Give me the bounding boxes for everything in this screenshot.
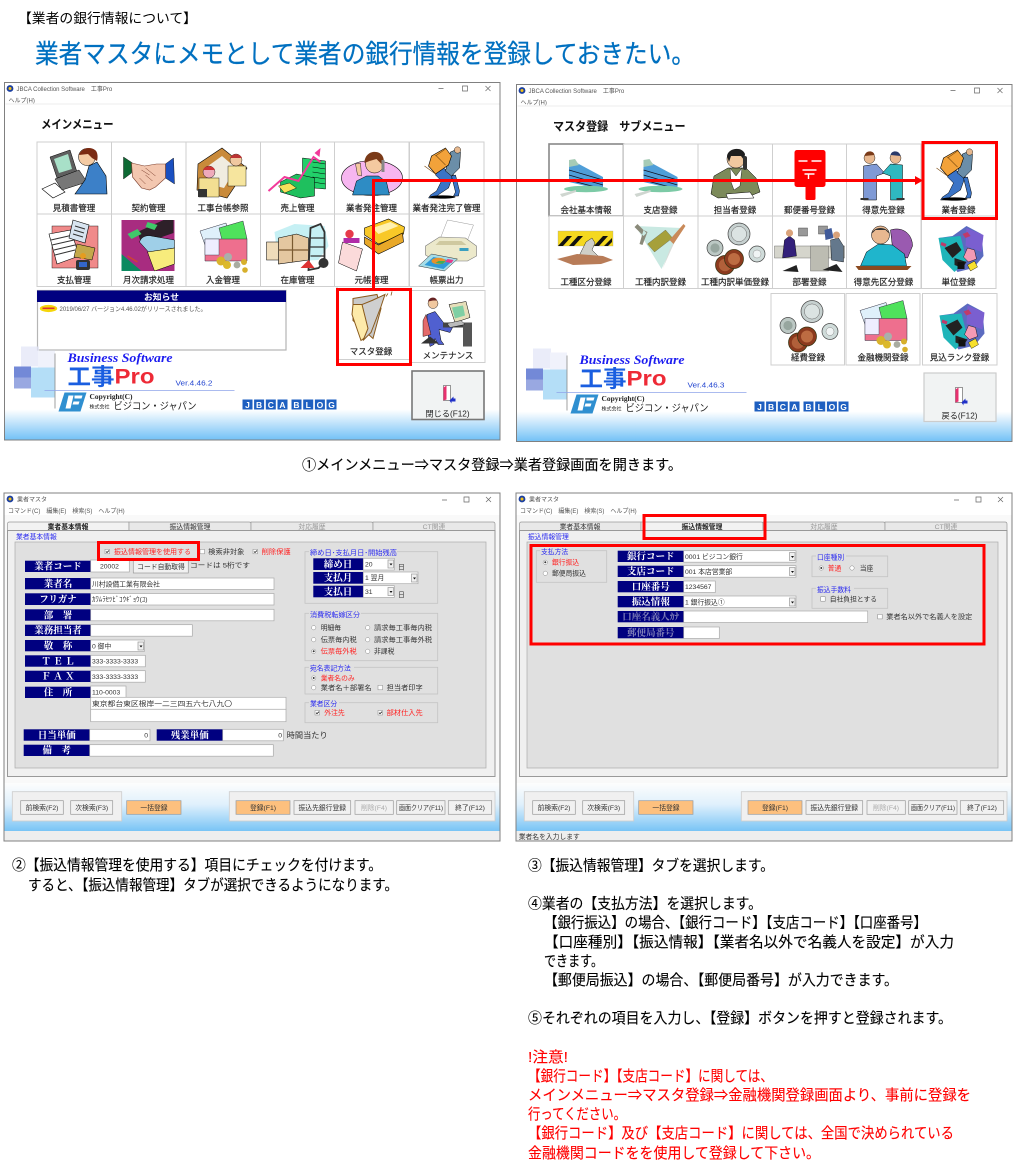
highlight: transfer fields red box	[531, 546, 984, 644]
bank fields: 口座番号	[632, 581, 670, 593]
group: addressee notation: 業者名のみ	[321, 673, 355, 682]
tile: 郵便番号登録	[772, 144, 847, 216]
group: vendor class	[305, 699, 438, 723]
text block: warning note: 行ってください。	[528, 1106, 626, 1123]
group: account type: 当座	[860, 563, 873, 572]
text block: warning note: メインメニュー⇒マスタ登録⇒金融機関登録画面より、事前に登録を	[528, 1087, 971, 1104]
bottom buttons: 一括登録	[140, 803, 168, 812]
JBCA BLOG badge: L	[818, 402, 823, 412]
JBCA BLOG badge: B	[256, 400, 262, 410]
text block: step 3: ③【振込情報管理】タブを選択します。	[528, 856, 774, 874]
notice box: 2019/06/27 バージョン4.46.02がリリースされました。	[60, 304, 206, 313]
text block: warning note: 【銀行コード】及び【支店コード】に関しては、全国で決められている	[528, 1125, 954, 1142]
panel: main menu window: JBCA Collection Software 工事Pro	[16, 85, 113, 93]
tile: メンテナンス	[411, 290, 485, 362]
tile: 単位登録	[922, 216, 996, 288]
vendor fields: コード自動取得	[137, 562, 185, 571]
JBCA BLOG badge: C	[268, 400, 274, 410]
vendor fields: 20002	[100, 564, 119, 570]
JBCA BLOG badge: O	[317, 400, 324, 410]
tile: 業者登録	[922, 144, 996, 216]
bottom buttons: 登録(F1)	[762, 803, 788, 812]
form group background	[527, 542, 998, 768]
bottom buttons: 画面クリア(F11)	[399, 804, 443, 812]
group: vendor class: 外注先	[324, 708, 345, 717]
logo: Business Software 工事Pro: Pro	[114, 366, 154, 388]
JBCA BLOG badge: J	[757, 402, 762, 412]
tile: 得意先区分登録: 得意先区分登録	[854, 277, 914, 287]
close button: 閉じる(F12)	[425, 410, 470, 418]
option: custom account holder	[878, 612, 973, 621]
vendor fields: 0	[278, 732, 282, 740]
tile: 帳票出力	[410, 214, 484, 286]
group: addressee notation: 担当者印字	[387, 683, 423, 692]
form pane	[520, 530, 1007, 776]
tabs	[520, 522, 1007, 531]
panel: vendor basic info window	[4, 493, 500, 841]
text block: warning note: 【銀行コード】【支店コード】に関しては、	[528, 1068, 773, 1085]
back button	[924, 373, 996, 422]
bottom buttons: 削除(F4)	[873, 803, 899, 812]
option checkboxes: 振込情報管理を使用する	[114, 547, 191, 556]
tile: 工種区分登録	[549, 216, 624, 288]
panel: master sub menu window: JBCA Collection Software 工事Pro	[528, 87, 625, 95]
tile: 郵便番号登録: 郵便番号登録	[784, 205, 835, 215]
tile: 支払管理	[37, 214, 112, 286]
highlight: 業者登録 red box	[923, 142, 996, 218]
group: transfer fee: 自社負担とする	[830, 594, 877, 603]
vendor fields: 333-3333-3333	[92, 674, 138, 681]
JBCA BLOG badge: L	[306, 400, 311, 410]
logo: Business Software 工事Pro: Ver.4.46.2	[176, 378, 212, 388]
logo: Business Software 工事Pro: Copyright(C)	[90, 393, 133, 401]
tile: 見込ランク登録	[922, 294, 997, 365]
group: payment method: 郵便局振込	[552, 569, 586, 578]
bottom buttons: 終了(F12)	[455, 803, 485, 812]
bottom buttons: 削除(F4)	[361, 803, 387, 812]
tile: 経費登録: 経費登録	[791, 352, 825, 362]
JBCA BLOG badge: J	[245, 400, 250, 410]
tile: 金融機関登録: 金融機関登録	[857, 352, 909, 362]
tile: 見込ランク登録: 見込ランク登録	[930, 352, 990, 362]
tile: 経費登録	[771, 294, 844, 365]
tile: 元帳管理	[334, 214, 409, 286]
vendor fields: 敬 称	[44, 640, 74, 652]
header label: 【業者の銀行情報について】	[18, 11, 197, 26]
group: transfer fee: 振込手数料	[817, 585, 851, 594]
tile: 業者発注管理	[334, 142, 409, 214]
tile: 工種内訳登録	[624, 216, 698, 288]
group: payment method	[536, 547, 607, 582]
bank fields: 001 本店営業部	[685, 567, 732, 576]
text block: step 4: できます。	[544, 953, 603, 970]
option checkboxes: 削除保護	[262, 547, 291, 556]
panel: transfer info window: 業者マスタ	[529, 495, 559, 503]
tile: 部署登録	[772, 216, 847, 288]
option: custom account holder: 業者名以外で名義人を設定	[886, 612, 973, 621]
bank fields: 口座名義人ｶﾅ	[622, 611, 679, 623]
tabs	[8, 522, 495, 531]
bottom buttons: 前検索(F2)	[538, 803, 570, 812]
title: 業者マスタにメモとして業者の銀行情報を登録しておきたい。	[35, 39, 695, 69]
tile: メンテナンス: メンテナンス	[423, 350, 473, 360]
group: closing and payment dates: 1 翌月	[365, 574, 384, 582]
text block: warning note	[528, 1049, 971, 1162]
tile: 支店登録	[624, 144, 698, 216]
group: consumption tax: 伝票毎内税	[321, 635, 357, 644]
text block: step 2: すると、【振込情報管理】タブが選択できるようになります。	[28, 876, 398, 894]
panel: vendor basic info window: コマンド(C) 編集(E) 検索(S) ヘルプ(H)	[8, 507, 125, 515]
tile: 業者発注完了管理: 業者発注完了管理	[412, 203, 481, 213]
group title: 振込情報管理: 振込情報管理	[528, 532, 569, 541]
text block: step 4: 【銀行振込】の場合、【銀行コード】【支店コード】【口座番号】	[544, 914, 927, 932]
bank fields: 1234567	[685, 584, 712, 591]
logo: Business Software 工事Pro: Business Software	[66, 350, 173, 365]
group: vendor class: 業者区分	[310, 699, 337, 708]
text block: warning note: 金融機関コードをを使用して登録して下さい。	[528, 1145, 820, 1162]
tile: マスタ登録: マスタ登録	[350, 346, 393, 356]
logo: Business Software 工事Pro: 工事	[580, 366, 626, 392]
group: closing and payment dates: 締め日･支払月日･開始残高	[310, 548, 397, 557]
vendor fields: Ｔ Ｅ Ｌ	[41, 656, 75, 667]
JBCA BLOG badge: O	[829, 402, 836, 412]
notice box	[37, 290, 286, 350]
JBCA BLOG badge: C	[780, 402, 786, 412]
bank fields: 0001 ビジコン銀行	[685, 552, 743, 561]
tile: 支払管理: 支払管理	[57, 275, 91, 285]
group: payment method: 銀行振込	[552, 558, 579, 567]
tile: 契約管理	[112, 142, 186, 214]
tabs: 業者基本情報	[48, 522, 89, 531]
bottom buttons: 次検索(F3)	[587, 803, 620, 812]
tabs: 振込情報管理	[170, 522, 211, 531]
panel: master sub menu window: ヘルプ(H)	[520, 100, 547, 106]
tabs: CT関連	[423, 522, 446, 531]
tile: 在庫管理	[260, 214, 335, 286]
tabs: CT関連	[935, 522, 958, 531]
tile: 業者発注完了管理	[410, 142, 484, 214]
vendor fields: 日当単価	[38, 729, 76, 741]
logo: Business Software 工事Pro: ビジコン・ジャパン	[114, 400, 196, 412]
vendor fields: 業者コード	[34, 561, 82, 573]
group: closing and payment dates: 締め日	[324, 558, 352, 570]
logo: Business Software 工事Pro: ビジコン・ジャパン	[626, 402, 708, 414]
tile: マスタ登録	[337, 286, 411, 360]
group: payment method: 支払方法	[541, 547, 568, 556]
group: consumption tax	[305, 610, 438, 661]
logo: Business Software 工事Pro: 工事	[68, 364, 114, 390]
tile: 得意先区分登録	[846, 216, 921, 288]
JBCA BLOG badge: A	[279, 400, 286, 410]
logo: Business Software 工事Pro	[526, 348, 746, 414]
tile: 入金管理: 入金管理	[206, 275, 240, 285]
bank fields: 支店コード	[627, 566, 674, 578]
group: closing and payment dates	[305, 548, 438, 603]
highlight: 振込情報管理 tab red box	[644, 516, 765, 538]
panel: main menu window: ヘルプ(H)	[8, 98, 35, 104]
vendor fields: 時間当たり	[287, 730, 328, 740]
vendor fields: フリガナ	[39, 594, 77, 606]
highlight: マスタ登録 red box	[338, 290, 410, 364]
vendor fields: ｶﾜﾑﾗｾﾂﾋﾞｺｳｷﾞｮｳ(ﾕ)	[92, 596, 148, 604]
close button	[412, 371, 484, 420]
bank fields	[618, 551, 868, 639]
tile: 得意先登録	[846, 144, 921, 216]
text block: step 4	[528, 896, 954, 989]
vendor fields: 住 所	[44, 687, 73, 699]
group: closing and payment dates: 20	[365, 562, 373, 568]
group: closing and payment dates: 日	[398, 564, 405, 572]
tabs: 対応履歴	[298, 522, 326, 531]
group: account type: 口座種別	[817, 552, 844, 562]
tabs: 振込情報管理	[682, 522, 723, 531]
tile: 工事台帳参照	[186, 142, 260, 214]
highlight: 振込情報管理を使用する red box	[98, 542, 198, 560]
group: closing and payment dates: 日	[398, 591, 405, 599]
status bar text: 業者名を入力します	[519, 832, 580, 841]
vendor fields: 備 考	[42, 745, 71, 757]
vendor fields: 残業単価	[171, 729, 209, 741]
group: consumption tax: 非課税	[374, 647, 395, 656]
group: account type	[812, 552, 888, 577]
panel: master sub menu window: マスタ登録 サブメニュー	[553, 118, 686, 134]
vendor fields: 0 御中	[92, 642, 111, 650]
tile: 入金管理	[186, 214, 260, 286]
panel: master sub menu window	[516, 84, 1012, 442]
JBCA BLOG badge	[754, 402, 848, 412]
bank fields: 銀行コード	[627, 551, 674, 563]
bottom buttons: 振込先銀行登録	[811, 803, 858, 812]
group: vendor class: 部材仕入先	[387, 708, 423, 717]
tile: 売上管理	[260, 142, 335, 214]
tile: 月次請求処理: 月次請求処理	[123, 275, 174, 285]
vendor fields: 東京都台東区根岸一二三四五六七八九〇	[92, 699, 232, 708]
panel: transfer info window: コマンド(C) 編集(E) 検索(S) ヘルプ(H)	[520, 507, 637, 515]
bottom buttons: 終了(F12)	[967, 803, 997, 812]
panel: main menu window	[4, 82, 500, 440]
back button: 戻る(F12)	[942, 412, 978, 420]
tile: 工種内訳単価登録: 工種内訳単価登録	[701, 277, 769, 287]
tile: 見積書管理: 見積書管理	[53, 203, 96, 213]
panel: transfer info window	[516, 493, 1012, 841]
logo: Business Software 工事Pro: Business Software	[578, 352, 685, 367]
logo: Business Software 工事Pro: 株式会社	[90, 404, 110, 410]
group: consumption tax: 明細毎	[321, 623, 341, 632]
tile: 工種内訳登録: 工種内訳登録	[635, 277, 686, 287]
bank fields: 振込情報	[632, 596, 670, 608]
tile: 会社基本情報: 会社基本情報	[560, 205, 612, 215]
bottom buttons: 登録(F1)	[250, 803, 276, 812]
tabs: 対応履歴	[810, 522, 838, 531]
vendor fields	[24, 560, 328, 757]
group: transfer fee	[812, 585, 888, 608]
text block: warning note: !注意!	[528, 1049, 568, 1066]
form group background	[15, 542, 486, 768]
tile: 担当者登録: 担当者登録	[714, 205, 757, 215]
JBCA BLOG badge: G	[328, 400, 335, 410]
caption: step 1: ①メインメニュー⇒マスタ登録⇒業者登録画面を開きます。	[302, 457, 682, 474]
tile: 売上管理: 売上管理	[280, 203, 315, 213]
tile: 担当者登録	[698, 144, 772, 216]
group: closing and payment dates: 31	[365, 589, 373, 596]
tile: 工事台帳参照: 工事台帳参照	[197, 203, 249, 213]
vendor fields: Ｆ Ａ Ｘ	[41, 672, 75, 683]
tile: 金融機関登録	[846, 294, 920, 365]
text block: step 4: 【郵便局振込】の場合、【郵便局番号】が入力できます。	[544, 972, 898, 989]
option checkboxes: 検索非対象	[208, 547, 245, 556]
panel: vendor basic info window: 業者マスタ	[17, 495, 47, 503]
logo: Business Software 工事Pro: Copyright(C)	[602, 395, 645, 403]
logo: Business Software 工事Pro	[14, 346, 234, 412]
logo: Business Software 工事Pro: Pro	[626, 368, 666, 390]
vendor fields: 業務担当者	[34, 625, 82, 637]
tile: 見積書管理	[37, 142, 112, 214]
tile: 部署登録: 部署登録	[792, 277, 827, 287]
JBCA BLOG badge: A	[791, 402, 798, 412]
group: account type: 普通	[828, 563, 841, 572]
tile: 工種区分登録: 工種区分登録	[560, 277, 612, 287]
text block: step 2: ②【振込情報管理を使用する】項目にチェックを付けます。	[12, 856, 382, 874]
vendor fields: コードは 5桁です	[190, 560, 250, 570]
tile: 支店登録: 支店登録	[643, 205, 678, 215]
text block: step 4: 【口座種別】【振込情報】【業者名以外で名義人を設定】が入力	[544, 934, 954, 951]
bottom buttons: 前検索(F2)	[26, 803, 58, 812]
vendor fields: 110-0003	[92, 690, 120, 696]
bank fields: 郵便局番号	[627, 627, 675, 639]
logo: Business Software 工事Pro: Ver.4.46.3	[688, 380, 724, 390]
group: addressee notation	[305, 664, 438, 694]
group: consumption tax: 伝票毎外税	[321, 647, 357, 656]
group: addressee notation: 宛名表記方法	[310, 664, 351, 672]
group: addressee notation: 業者名＋部署名	[321, 683, 372, 692]
panel: main menu window: メインメニュー	[41, 118, 114, 132]
vendor fields: 0	[144, 732, 148, 740]
JBCA BLOG badge: G	[840, 402, 847, 412]
tile: 元帳管理: 元帳管理	[354, 275, 389, 285]
tile: 月次請求処理	[112, 214, 186, 286]
text block: step 2	[12, 856, 398, 894]
group: consumption tax: 請求毎工事毎内税	[374, 623, 432, 632]
bank fields: 1 銀行振込①	[685, 598, 725, 606]
logo: Business Software 工事Pro: 株式会社	[602, 406, 622, 412]
form pane	[8, 530, 495, 776]
tile: 帳票出力: 帳票出力	[429, 275, 464, 285]
tile: 会社基本情報	[549, 144, 624, 216]
arrow: master menu to vendor registration	[374, 176, 923, 288]
vendor fields: 333-3333-3333	[92, 658, 138, 666]
group: consumption tax: 消費税転嫁区分	[310, 610, 360, 619]
bottom buttons: 振込先銀行登録	[299, 803, 346, 812]
JBCA BLOG badge: B	[768, 402, 774, 412]
bottom buttons	[12, 792, 495, 821]
JBCA BLOG badge	[242, 400, 336, 410]
tile: 契約管理: 契約管理	[131, 203, 166, 213]
tile: 業者登録: 業者登録	[941, 205, 976, 215]
text block: step 5: ⑤それぞれの項目を入力し、【登録】ボタンを押すと登録されます。	[528, 1010, 952, 1027]
tile: 業者発注管理: 業者発注管理	[346, 203, 397, 213]
group: closing and payment dates: 支払月	[324, 572, 352, 584]
tabs: 業者基本情報	[560, 522, 601, 531]
tile: 単位登録: 単位登録	[941, 277, 976, 287]
bottom buttons	[524, 792, 1007, 821]
JBCA BLOG badge: B	[293, 400, 300, 410]
tile: 得意先登録: 得意先登録	[862, 205, 905, 215]
option checkboxes	[105, 547, 291, 556]
vendor fields: 部 署	[44, 609, 73, 621]
bottom buttons: 次検索(F3)	[75, 803, 108, 812]
bottom buttons: 画面クリア(F11)	[911, 804, 955, 812]
tile: 工種内訳単価登録	[698, 216, 772, 288]
tile: 在庫管理: 在庫管理	[280, 275, 315, 285]
vendor fields: 業者名	[44, 578, 72, 590]
group title: 業者基本情報: 業者基本情報	[16, 532, 57, 541]
group: closing and payment dates: 支払日	[324, 586, 352, 598]
vendor fields: 川村設備工業有限会社	[92, 580, 160, 588]
group: consumption tax: 請求毎工事毎外税	[374, 635, 432, 644]
bottom buttons: 一括登録	[652, 803, 680, 812]
JBCA BLOG badge: B	[805, 402, 812, 412]
text block: step 4: ④業者の【支払方法】を選択します。	[528, 896, 762, 912]
notice box: お知らせ	[144, 291, 179, 302]
